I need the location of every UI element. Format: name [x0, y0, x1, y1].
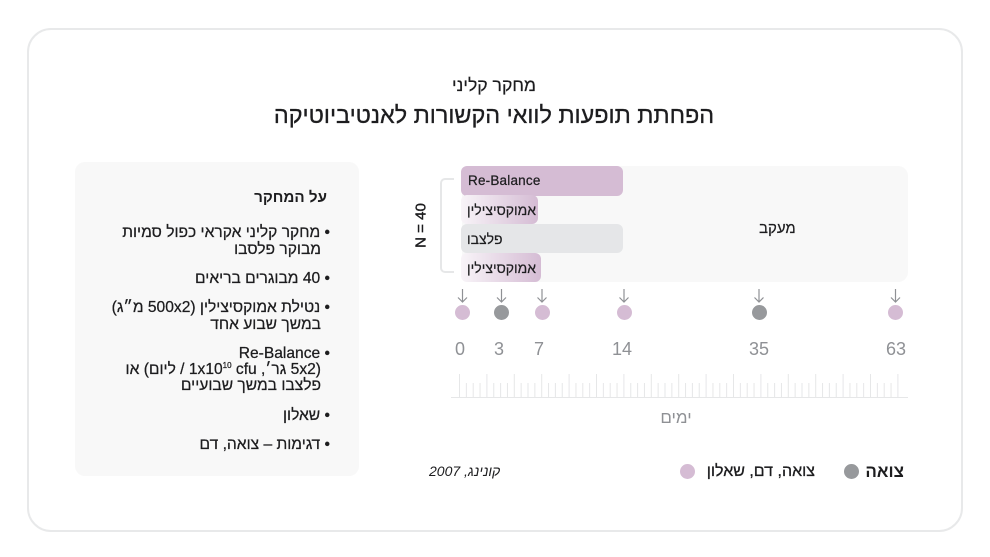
ruler axis: [451, 374, 908, 398]
arrow day 7: [538, 289, 546, 302]
bullet: amoxicillin: במשך שבוע אחד: [210, 316, 321, 333]
N = 40 label: N = 40: [412, 203, 430, 248]
arrow day 0: [458, 289, 467, 302]
legend dot: stool: [844, 464, 859, 479]
panel heading: על המחקר: [254, 189, 327, 206]
day label 0: 0: [455, 339, 465, 359]
bullet list: [112, 224, 330, 453]
sampling dot day 0: [455, 305, 470, 320]
bar label: פלצבו: [467, 231, 503, 247]
panel: about the study: [75, 162, 359, 476]
bullet: study design: מבוקר פלסבו: [234, 241, 321, 258]
arrow day 63: [891, 289, 900, 302]
bracket: [440, 178, 454, 273]
follow-up label: מעקב: [759, 220, 796, 237]
bar label: Re-Balance: [468, 173, 541, 188]
arrow day 14: [620, 289, 628, 302]
arrow day 3: [497, 289, 506, 302]
bullet: study design: [122, 224, 330, 258]
sampling dot day 3: [494, 305, 509, 320]
bar label: אמוקסיצילין: [467, 260, 536, 276]
bullet: amoxicillin: [112, 298, 330, 333]
day label 3: 3: [494, 339, 504, 359]
bullet: samples: • דגימות – צואה, דם: [199, 436, 330, 453]
bullet: re-balance: [126, 345, 330, 394]
bullet: re-balance: • Re-Balance: [239, 345, 330, 362]
bar label: אמוקסיצילין: [467, 202, 536, 218]
sampling dot day 14: [616, 305, 632, 320]
bullet: re-balance: פלצבו במשך שבועיים: [181, 377, 321, 394]
sampling dot day 35: [752, 305, 766, 320]
legend dot: stool, blood, questionnaire: [680, 464, 695, 479]
legend: [680, 462, 904, 481]
legend item: stool, blood, questionnaire: צואה, דם, שאלון: [707, 463, 815, 480]
subtitle: מחקר קליני: [452, 75, 536, 95]
day label 7: 7: [534, 339, 544, 359]
bar: re-balance: [461, 166, 623, 196]
day label 35: 35: [749, 339, 769, 359]
citation: קונינג, 2007: [429, 463, 500, 479]
legend item: stool: צואה: [865, 462, 904, 481]
sampling dot day 7: [534, 305, 550, 320]
title: הפחתת תופעות לוואי הקשורות לאנטיביוטיקה: [274, 102, 714, 128]
day label 14: 14: [612, 339, 632, 359]
arrow day 35: [754, 289, 764, 302]
bar: amoxicillin 2: [461, 253, 541, 282]
follow-up band: [462, 166, 908, 282]
bullet: participants: • 40 מבוגרים בריאים: [195, 270, 330, 287]
sampling dot day 63: [888, 305, 903, 320]
bullet: amoxicillin: • נטילת אמוקסיצילין (500x2 מ״ג): [112, 299, 330, 316]
bullet: questionnaire: • שאלון: [283, 407, 330, 424]
axis label: days: ימים: [660, 408, 692, 427]
bar: placebo: [461, 224, 623, 253]
bar: amoxicillin 1: [461, 195, 538, 224]
bullet: study design: • מחקר קליני אקראי כפול סמיות: [122, 224, 330, 241]
bullet: re-balance: (5x2 גר׳, 1x1010 cfu / ליום) או: [126, 361, 321, 378]
day label 63: 63: [886, 339, 906, 359]
